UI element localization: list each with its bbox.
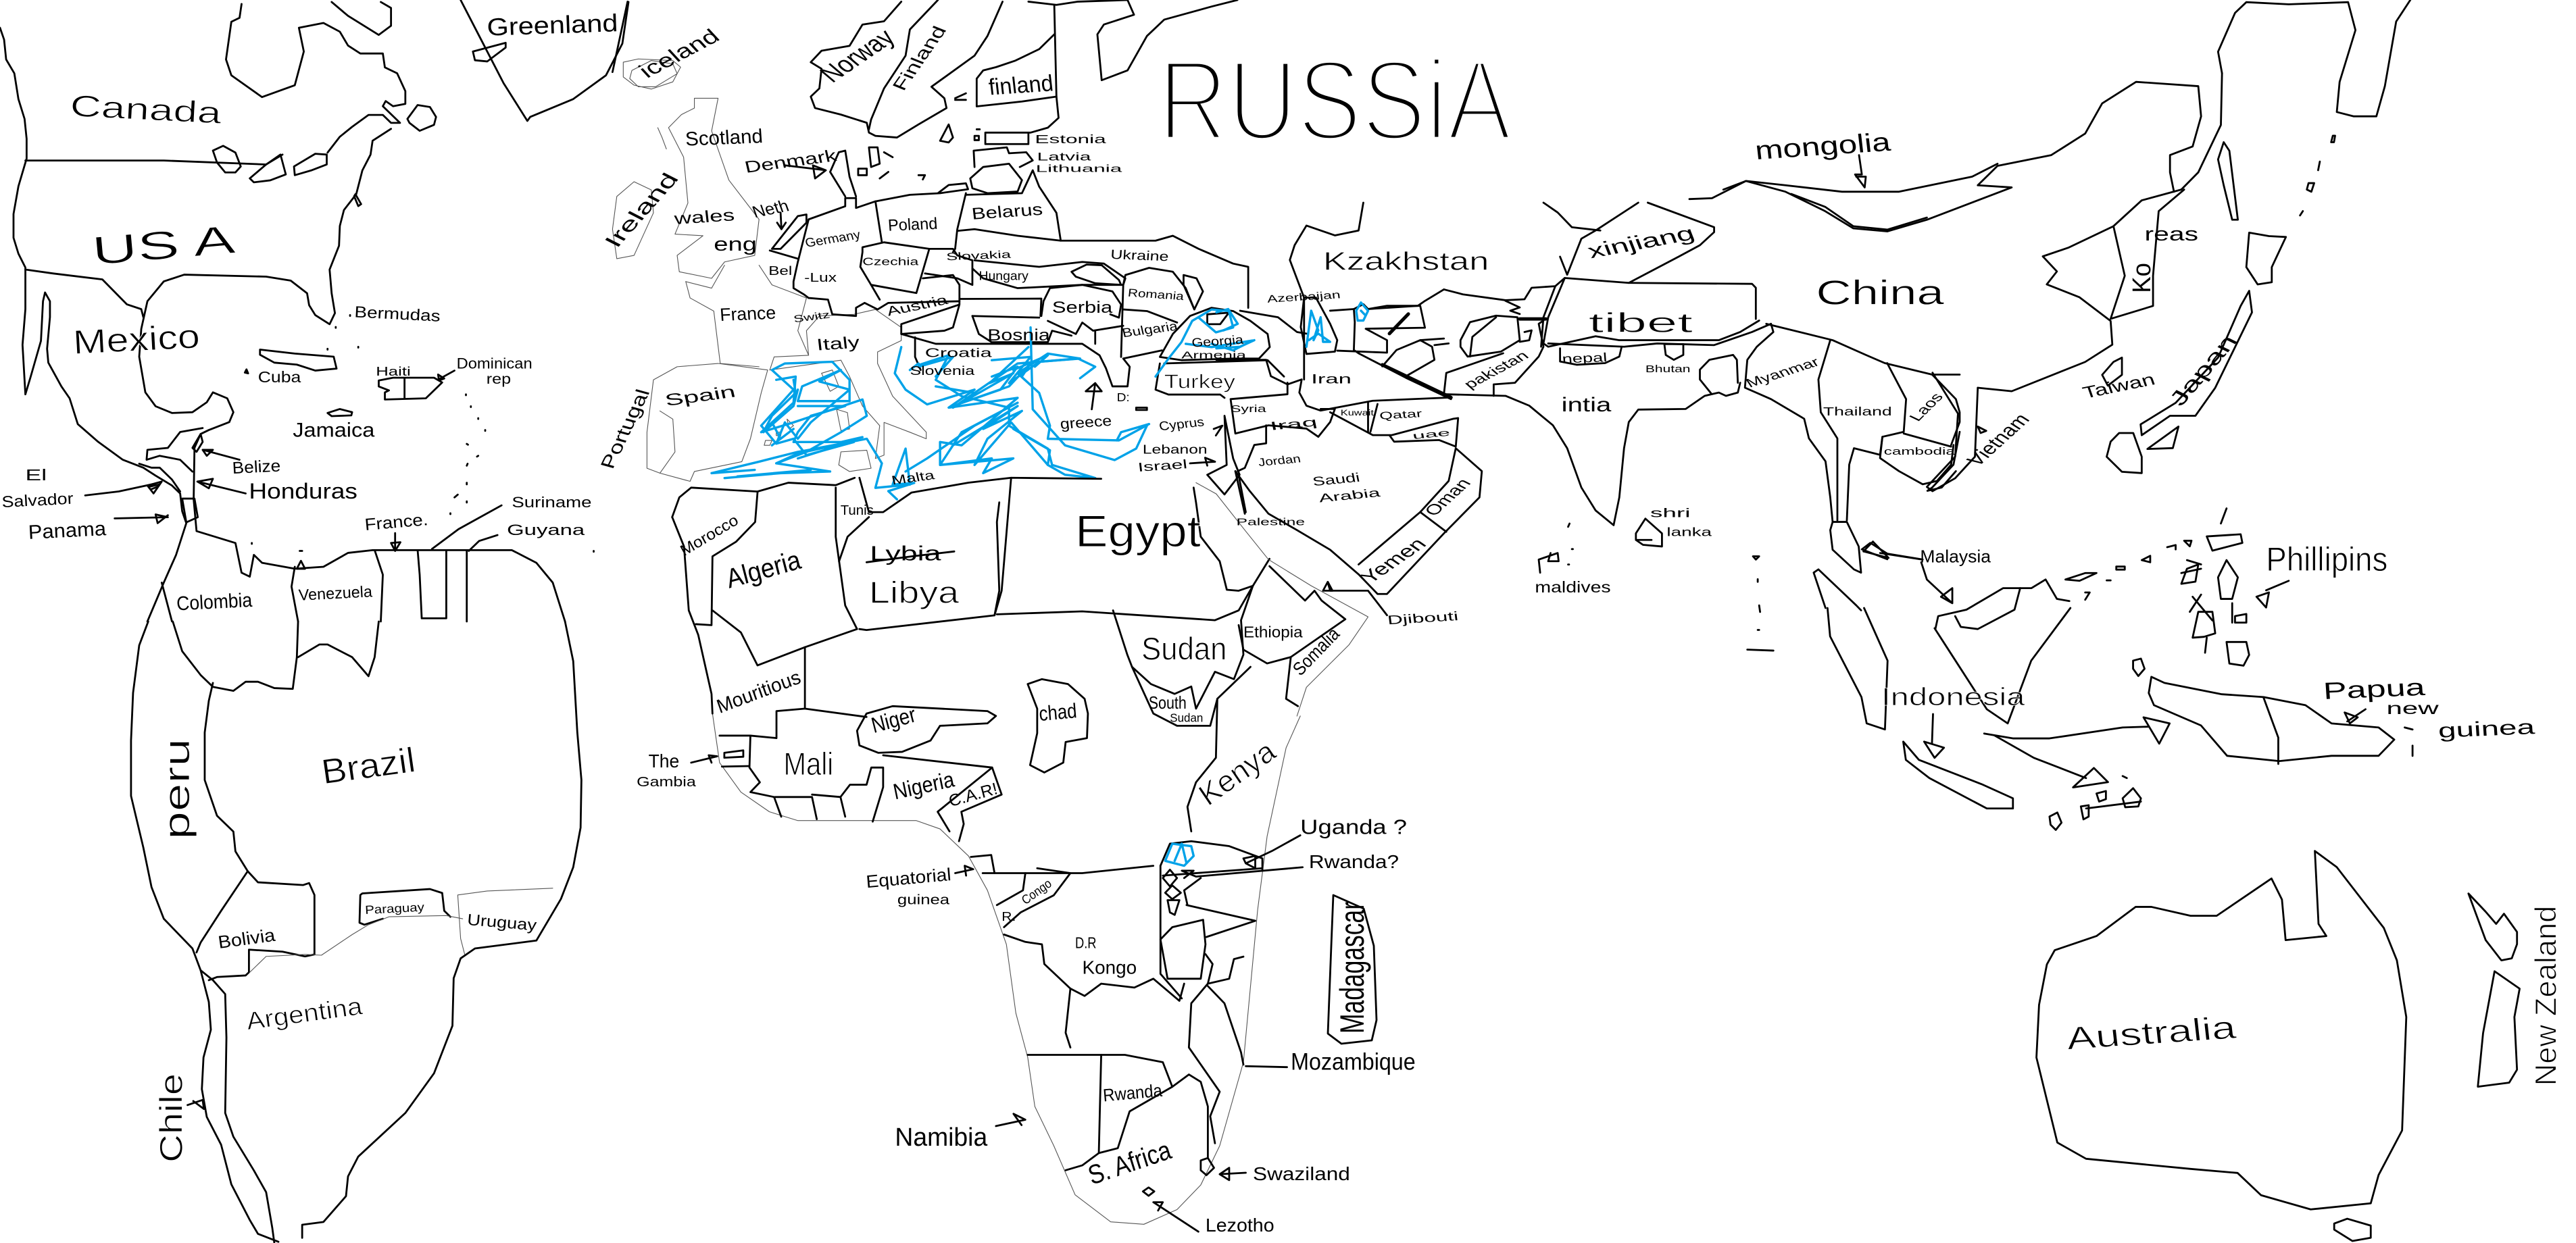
label: Bhutan: Bhutan [1645,363,1690,374]
panel: North America [0,0,628,622]
label: guinea: guinea [2437,716,2536,742]
label: Paraguay: Paraguay [365,900,424,917]
label: The: The [649,751,679,771]
label: new: new [2386,699,2439,718]
label: Guyana: Guyana [507,521,585,538]
arrows: East Asia callouts [1855,155,1986,603]
label: Yemen: Yemen [1356,535,1431,587]
label: Cambodia: cambodia [1884,446,1956,457]
outlines: thin Red Sea and Horn coast [1216,494,1368,716]
label: Koreas top: reas [2145,224,2198,245]
outlines: heavy borders near Iran and Pakistan [1383,314,1546,397]
label: Slovakia: Slovakia [946,249,1012,263]
label: Colombia: Colombia [176,589,253,615]
label: Rwanda question: Rwanda? [1309,851,1399,872]
label: Congo: Congo [1019,876,1054,907]
label: Libya: Libya [869,576,960,610]
label: Haiti: Haiti [376,365,411,379]
label: Italy: Italy [816,333,862,355]
arrow: Greece [1086,383,1101,409]
label: USA: US A [90,217,237,274]
label: Argentina: Argentina [245,992,364,1035]
label: Finland: finland [987,70,1055,100]
label: Turkey: Turkey [1164,371,1235,392]
label: Rwanda: Rwanda [1102,1081,1164,1106]
label: Wales: wales [672,206,735,228]
scribble: blue on Uganda [1165,844,1193,866]
label: Lebanon: Lebanon [1143,442,1208,457]
label: India: intia [1562,393,1612,416]
label: Australia: Australia [2064,1010,2237,1057]
label: Belize: Belize [232,457,281,478]
label: UAE: uae [1412,428,1451,441]
label: Israel: Israel [1137,457,1188,474]
strikethrough: Lybia [866,551,954,562]
label: Greece: greece [1060,413,1113,432]
label: Uganda: Uganda ? [1300,816,1407,838]
label: Laos: Laos [1905,390,1947,424]
label: Bermudas: Bermudas [354,303,441,326]
label: Iraq: Iraq [1268,415,1318,433]
label: Croatia: Croatia [925,346,992,360]
label: Honduras: Honduras [249,479,357,503]
arrow: Denmark [785,166,826,178]
label: Lybia crossed out: Lybia [870,542,941,565]
panel: East Asia [1689,0,2410,665]
label: Mali: Mali [784,746,833,782]
label: Estonia: Estonia [1035,133,1107,146]
label: Ukraine: Ukraine [1110,247,1169,264]
label: Equatorial: Equatorial [865,865,952,892]
label: Somalia: Somalia [1289,622,1343,680]
scribble: blue sea east of Italy [895,328,1149,478]
label: Hungary: Hungary [979,269,1029,283]
label: El: El [26,466,47,484]
label: Canada: Canada [69,88,223,130]
label: Pakistan: pakistan [1460,348,1532,391]
panel: Africa [637,476,1416,1236]
label: Oman: Oman [1420,476,1475,519]
label: Tibet: tibet [1589,307,1693,338]
label: Mauritius: Mouritious [714,666,803,718]
label: Brazil: Brazil [319,740,418,792]
label: Azerbaijan: Azerbaijan [1266,289,1341,305]
label: Dominican: Dominican [457,355,532,372]
arrows: Indonesia and Papua callouts [1924,709,2366,788]
panel: Oceania [1827,608,2563,1241]
label: Koreas side: Ko [2128,263,2156,293]
panel: South America [131,622,581,1243]
outlines: South America [131,622,581,1243]
scribble: blue in Caspian and Aral [1216,303,1368,349]
label: Chad: chad [1038,700,1078,726]
outline: Madagascar [1328,895,1377,1044]
label: Belgium: Bel [768,264,792,278]
label: France: France [719,303,776,325]
label: Papua: Papua [2323,674,2427,705]
label: Jordan: Jordan [1257,453,1302,469]
label: Austria: Austria [884,292,950,319]
outlines: thin western Europe coasts [612,59,926,482]
label: Salvador: Salvador [1,490,74,511]
label: Suriname: Suriname [512,493,592,511]
label: Latvia: Latvia [1037,151,1091,163]
label: Japan: Japan [2164,332,2243,409]
arrow: Netherlands [777,213,786,229]
label: Malta: Malta [890,468,936,488]
arrow: Chile [188,1100,204,1109]
label: Denmark: Denmark [743,147,839,177]
label: Venezuela: Venezuela [298,583,373,605]
label: Kenya: Kenya [1193,734,1282,813]
panel: Middle East and South Asia [1216,203,1960,716]
scribble: blue sea west of Italy [712,362,914,499]
label: New Zealand: New Zealand [2530,906,2563,1086]
label: D.R: D.R [1075,934,1097,952]
arrows: Africa callouts [691,755,1303,1232]
label: S. Africa: S. Africa [1085,1135,1174,1191]
label: D: D: [1117,391,1130,404]
label: Arabia: Arabia [1318,486,1382,505]
label: Spain: Spain [663,382,737,410]
outlines: Indonesia and Oceania [1827,608,2520,1241]
label: Slovenia: Slovenia [910,364,974,378]
label: Bolivia: Bolivia [217,925,276,953]
label: Myanmar: Myanmar [1743,355,1823,390]
outlines: thin Argentina and Uruguay borders [250,888,553,972]
label: Malaysia: Malaysia [1920,547,1991,566]
arrows: North and Central America callouts [85,371,501,551]
label: Qatar: Qatar [1379,408,1423,422]
label: Mongolia: mongolia [1754,128,1892,166]
label: Madagascar: Madagascar [1333,902,1371,1034]
label: Lanka: lanka [1666,525,1712,538]
panel: Madagascar [1328,895,1377,1044]
label: rep: rep [487,371,511,387]
label: Indonesia: Indonesia [1881,683,2025,711]
label: Germany: Germany [803,228,862,250]
outlines: North and Central America [0,0,628,622]
label: Tunis: Tunis [841,503,874,518]
label: R: R. [1001,909,1016,923]
label: Mexico: Mexico [72,317,201,361]
outlines: East Asia [1689,0,2410,629]
label: Lithuania: Lithuania [1036,163,1122,174]
label: Swaziland: Swaziland [1253,1163,1350,1184]
icon: Philippines island cluster [2181,560,2289,665]
label: Ethiopia: Ethiopia [1243,623,1303,641]
label: Egypt: Egypt [1075,507,1201,556]
label: Peru: peru [157,738,197,840]
arrows: Lebanon and Israel [1190,426,1222,465]
label: Cyprus: Cyprus [1158,415,1205,434]
label: Namibia: Namibia [895,1122,988,1151]
label: Jamaica: Jamaica [293,420,375,441]
label: Norway: Norway [814,24,901,87]
label: Sudan: Sudan [1141,631,1227,666]
label: Armenia: Armenia [1181,350,1247,361]
panel: Europe [597,0,1512,499]
outlines: Middle East and South Asia [1216,203,1960,651]
label: Neth: Neth [750,197,791,222]
scribble: blue around Georgia [1156,309,1253,376]
label: Serbia: Serbia [1052,298,1112,317]
outlines: Europe and Near East [612,0,1284,494]
label: Djibouti: Djibouti [1387,609,1459,627]
label: Luxembourg: -Lux [804,271,837,284]
label: Scotland: Scotland [685,125,764,151]
label: Maldives: maldives [1535,579,1611,596]
label: Kongo: Kongo [1082,957,1137,978]
label: Nigeria: Nigeria [891,767,956,804]
label: Iran: Iran [1311,372,1352,386]
label: Finland (Sweden position): Finland [889,24,951,93]
label: Panama: Panama [28,518,107,544]
label: Morocco: Morocco [677,511,741,559]
label: China: China [1816,274,1945,312]
label: Cuba: Cuba [258,369,301,386]
label: Georgia: Georgia [1191,333,1244,350]
label: Niger: Niger [868,702,918,738]
label: France: France. [364,511,429,534]
label: Ireland: Ireland [599,169,684,251]
label: South: South [1149,694,1187,713]
label: Philippines: Phillipins [2266,541,2387,578]
label: Bulgaria: Bulgaria [1120,319,1179,340]
label: Xinjiang: xinjiang [1584,222,1698,263]
label: CAR: C.A.R! [947,780,999,811]
label: Poland: Poland [887,214,938,235]
outlines: African countries [672,476,1345,1196]
label: Switzerland: Switz [793,309,831,325]
label: Czechia: Czechia [862,256,919,268]
label: South Sudan second line: Sudan [1170,711,1203,725]
label: Lesotho: Lezotho [1206,1215,1274,1236]
label: Portugal: Portugal [597,387,654,471]
label: Kazakhstan: Kzakhstan [1323,247,1489,275]
label: Mozambique: Mozambique [1291,1049,1416,1075]
label: Kuwait: Kuwait [1341,409,1374,417]
label: Romania: Romania [1127,287,1185,303]
label: Belarus: Belarus [970,200,1043,224]
label: England: eng [714,233,757,255]
label: Uruguay: Uruguay [466,911,537,934]
label: Syria: Syria [1231,403,1267,414]
label: Guinea: guinea [897,892,950,907]
label: Taiwan: Taiwan [2080,370,2158,402]
outlines: thin African coast [712,483,1300,1224]
label: Greenland: Greenland [487,9,618,41]
label: Russia: RUSSiA [1158,37,1512,165]
label: Algeria: Algeria [723,544,804,594]
label: Saudi: Saudi [1311,470,1361,488]
label: Gambia: Gambia [637,775,697,790]
label: Shri: shri [1650,505,1690,519]
outline: Caspian Sea [1301,298,1337,354]
label: Palestine: Palestine [1236,517,1305,528]
label: Nepal: nepal [1562,350,1608,366]
label: Iceland: iceland [634,25,724,82]
label: Bosnia: Bosnia [987,326,1050,345]
label: Vietnam: Vietnam [1962,410,2035,470]
label: Thailand: Thailand [1823,405,1892,418]
label: Chile: Chile [153,1073,189,1163]
